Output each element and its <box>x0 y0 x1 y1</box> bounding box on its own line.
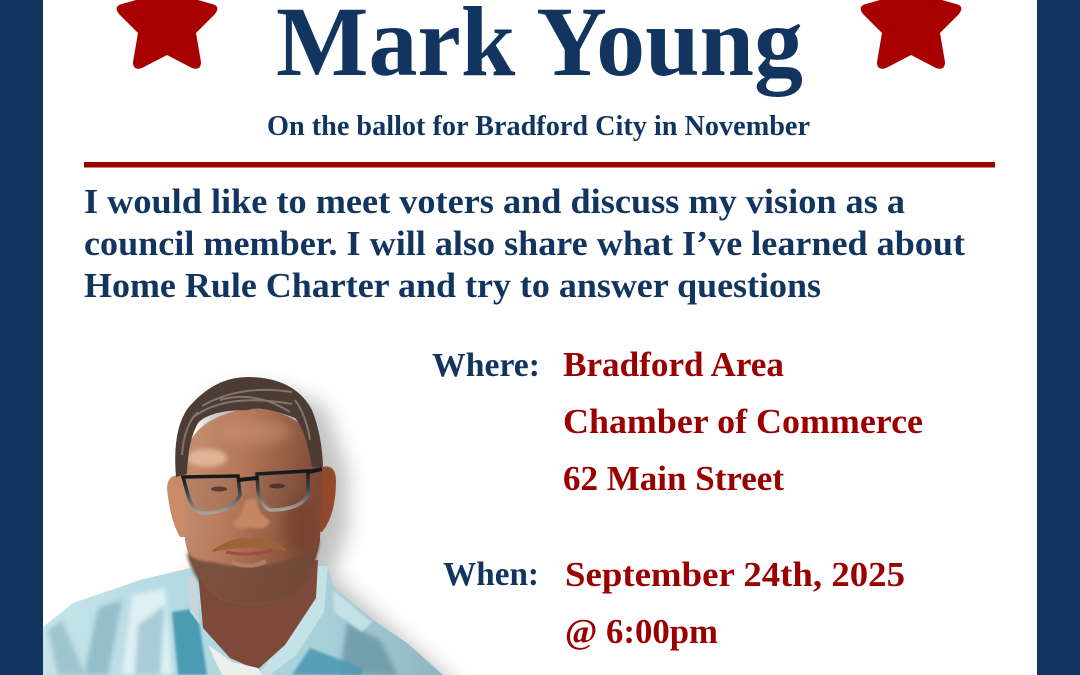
where details: Chamber of Commerce <box>563 402 923 441</box>
left ear <box>167 475 185 537</box>
when details <box>565 555 905 651</box>
where details: 62 Main Street <box>563 459 784 498</box>
shirt <box>43 563 443 675</box>
when label: When: <box>443 556 539 593</box>
when details: @ 6:00pm <box>565 612 718 651</box>
left navy side bar <box>0 0 43 675</box>
red divider rule <box>84 162 995 168</box>
right ear <box>320 466 336 532</box>
face <box>184 408 322 606</box>
intro paragraph <box>84 182 965 305</box>
shirt shading folds <box>48 566 398 675</box>
hair <box>175 377 323 477</box>
where details <box>563 345 923 498</box>
when details: September 24th, 2025 <box>565 555 905 594</box>
subtitle: On the ballot for Bradford City in November <box>267 111 810 142</box>
right navy side bar <box>1037 0 1080 675</box>
eyes <box>211 484 285 492</box>
intro paragraph: council member. I will also share what I’ve learned about <box>84 224 965 263</box>
icon: left red star <box>117 0 217 69</box>
intro paragraph: I would like to meet voters and discuss my vision as a <box>84 182 905 221</box>
hair highlights <box>182 390 310 455</box>
face shading <box>187 420 316 553</box>
glasses <box>183 469 322 513</box>
moustache and mouth <box>213 539 284 566</box>
where label: Where: <box>432 347 540 384</box>
where details: Bradford Area <box>563 345 784 384</box>
undershirt <box>208 645 262 675</box>
portrait of Mark Young <box>43 377 465 675</box>
beard <box>186 540 320 606</box>
intro paragraph: Home Rule Charter and try to answer questions <box>84 266 821 305</box>
portrait drop shadow <box>186 378 459 675</box>
neck <box>198 560 318 670</box>
icon: right red star <box>861 0 961 69</box>
